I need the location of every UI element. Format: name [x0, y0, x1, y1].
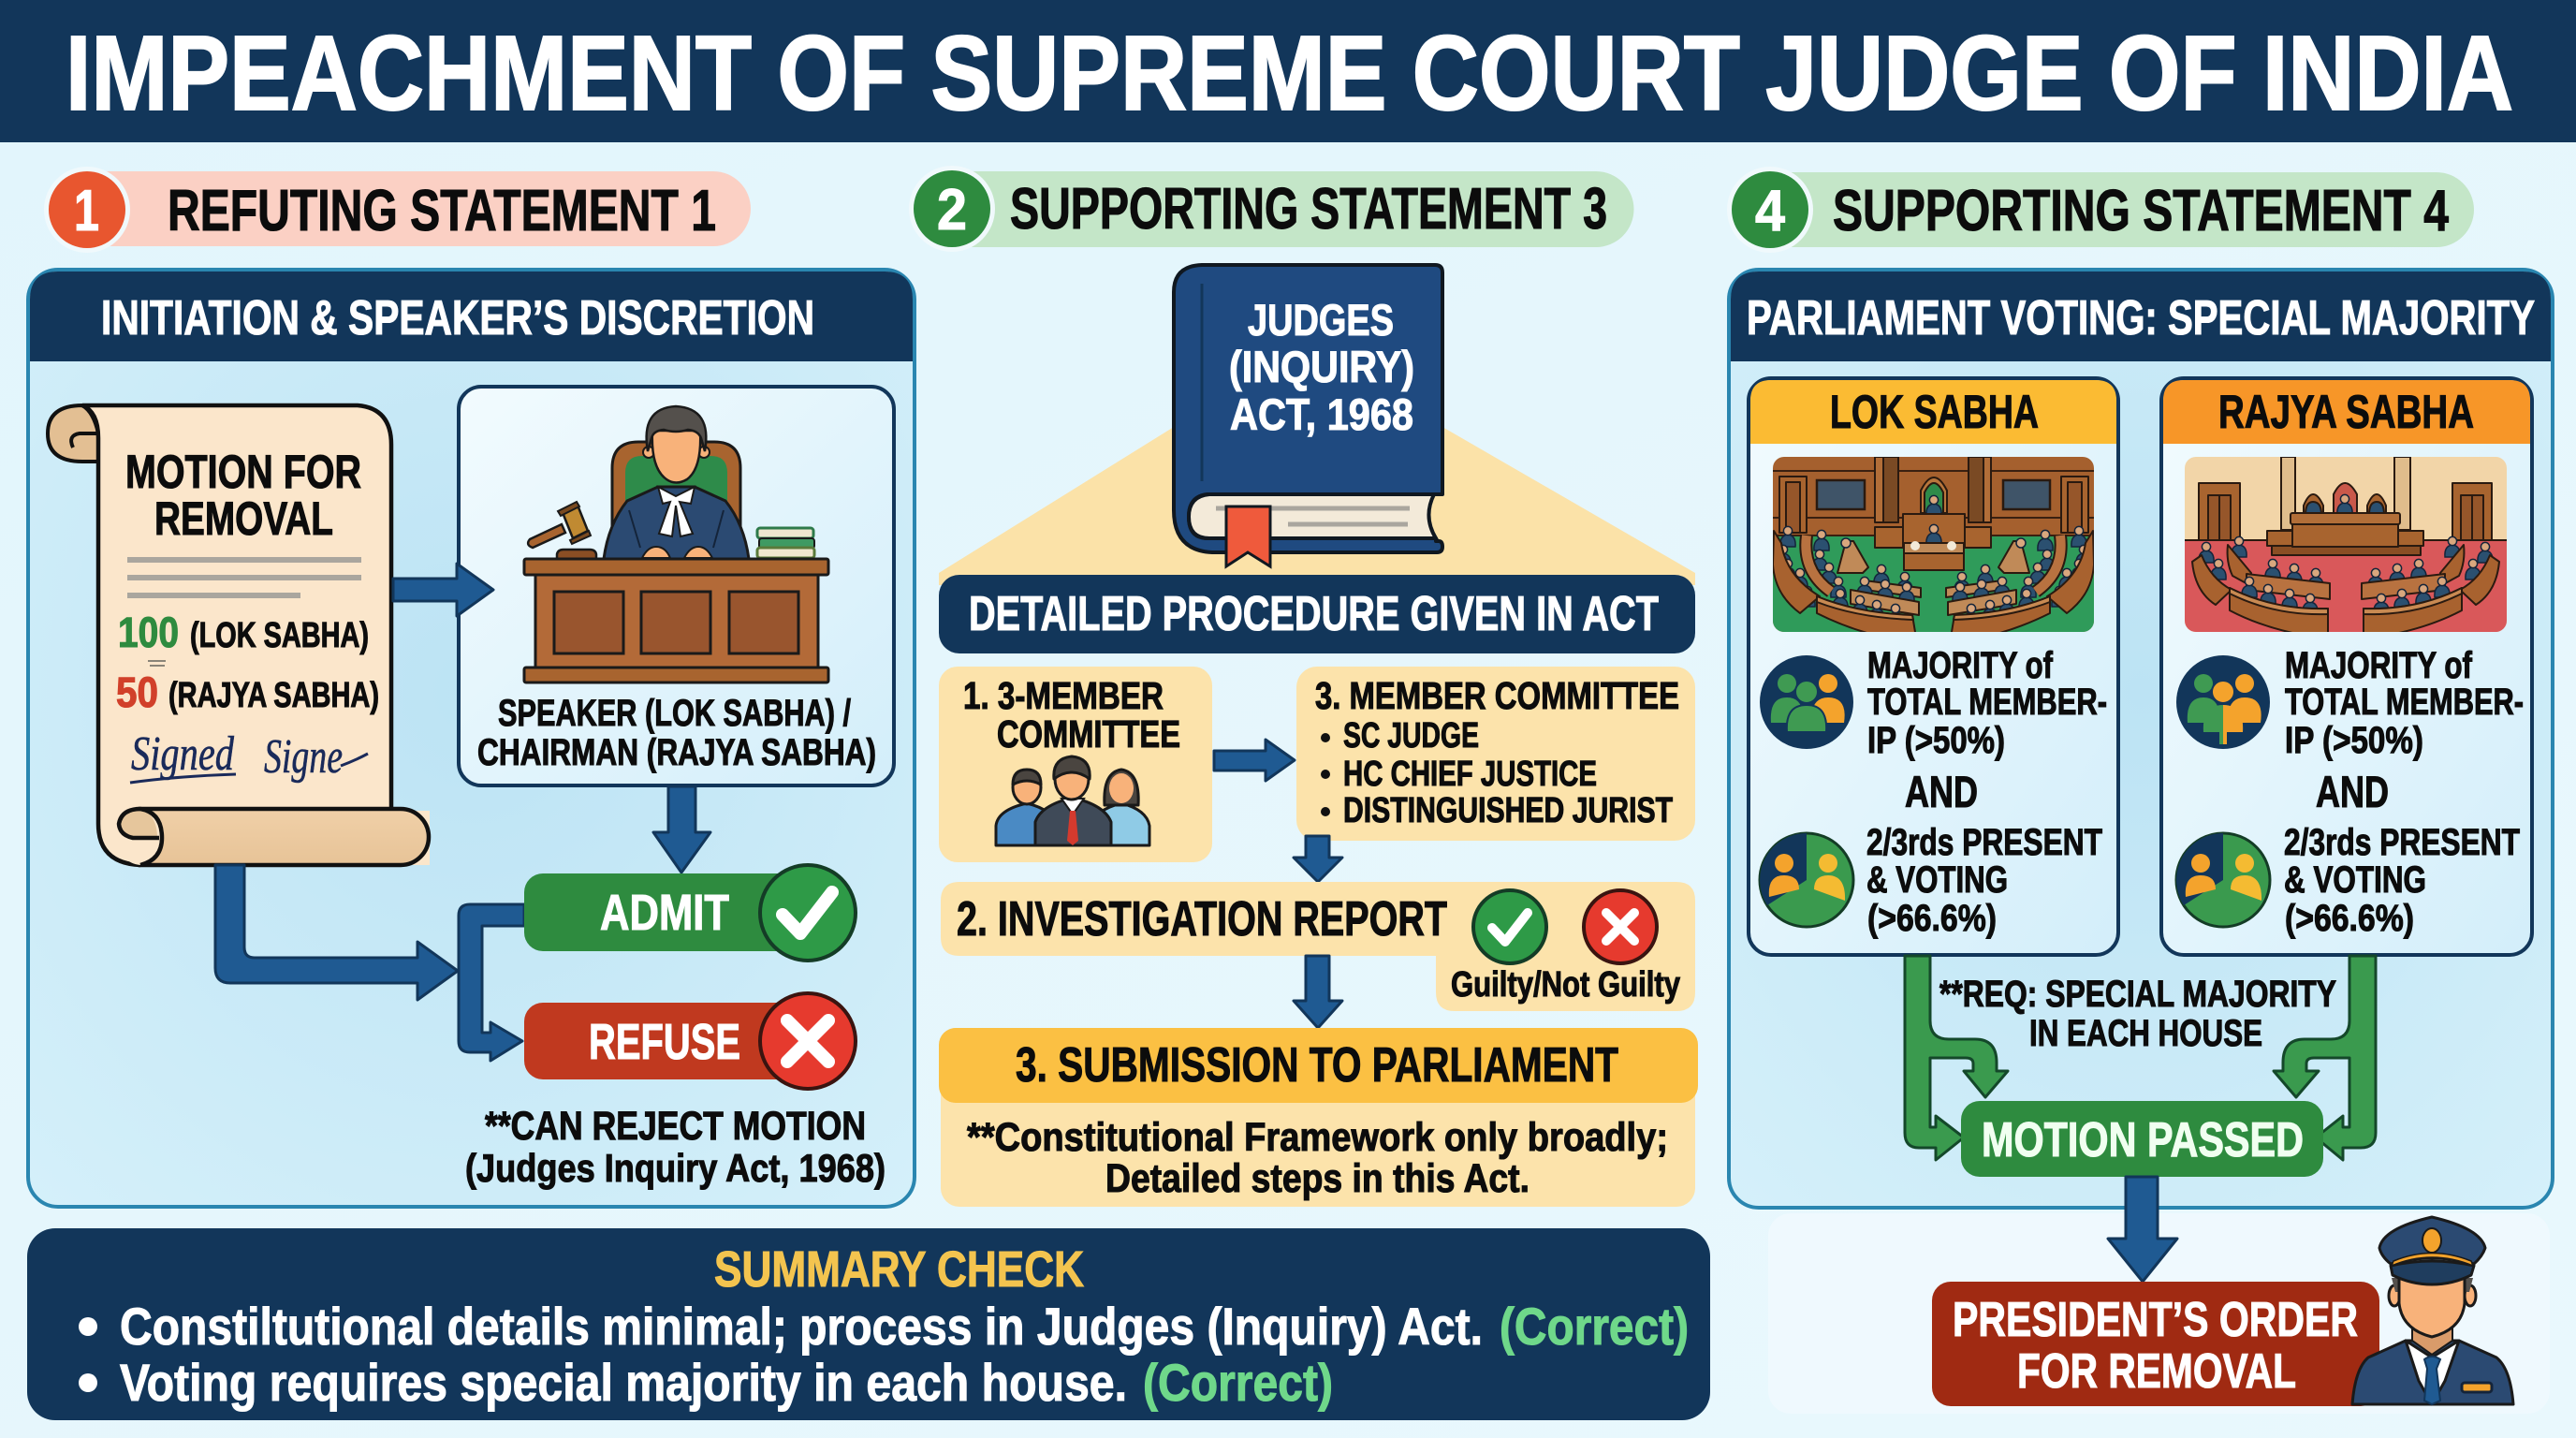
card: rajya sabha: 2/3rds PRESENT	[2284, 822, 2520, 863]
panel heading	[1731, 271, 2551, 361]
box: 3-member committee	[939, 667, 1212, 862]
box: investigation report: 2. INVESTIGATION REPORT	[957, 892, 1447, 946]
panel heading	[30, 271, 913, 361]
note: can reject motion: **CAN REJECT MOTION	[485, 1104, 866, 1149]
banner: detailed procedure: DETAILED PROCEDURE GIVEN IN ACT	[969, 587, 1659, 641]
banner: detailed procedure	[939, 575, 1695, 653]
scroll: motion for removal: REMOVAL	[154, 492, 333, 545]
card: lok sabha	[1749, 378, 2118, 955]
icon: two-thirds pie	[1760, 833, 1853, 927]
box: member committee list: HC CHIEF JUSTICE	[1343, 755, 1597, 794]
button: refuse: REFUSE	[589, 1014, 740, 1070]
box: member committee list	[1296, 667, 1695, 841]
scroll: motion for removal: 100	[118, 609, 179, 656]
scroll: motion for removal: 50	[116, 668, 158, 716]
box: member committee list: 3. MEMBER COMMITTEE	[1315, 674, 1679, 717]
scroll: motion for removal: (LOK SABHA)	[190, 616, 369, 655]
box: submission to parliament: 3. SUBMISSION TO PARLIAMENT	[1016, 1038, 1618, 1093]
icon: judge at desk	[524, 406, 828, 682]
scroll: motion for removal	[48, 405, 430, 865]
card: lok sabha: (>66.6%)	[1867, 898, 1997, 939]
arrow: committee	[1214, 740, 1295, 781]
panel: initiation and speaker's discretion	[28, 270, 915, 1207]
box: investigation report	[941, 882, 1695, 1011]
panel: summary check	[27, 1228, 1710, 1420]
arrow: motion passed to president's order	[2108, 1177, 2177, 1282]
note: special majority requirement: IN EACH HOUSE	[2029, 1013, 2262, 1054]
arrows: lok sabha to motion passed	[1905, 956, 2008, 1160]
section label: supporting statement 3: 2	[937, 178, 967, 242]
box: submission to parliament: Detailed steps in this Act.	[1105, 1156, 1530, 1201]
box: motion passed: MOTION PASSED	[1982, 1113, 2304, 1167]
box: member committee list: SC JUDGE	[1343, 716, 1479, 756]
icon: president in uniform	[2352, 1217, 2513, 1404]
arrow: scroll to speaker	[393, 564, 493, 616]
box: president's order: FOR REMOVAL	[2017, 1344, 2296, 1399]
box: member committee list: DISTINGUISHED JURIST	[1343, 791, 1673, 830]
panel heading: INITIATION & SPEAKER’S DISCRETION	[101, 291, 814, 345]
icon: three people	[996, 756, 1149, 845]
scroll: motion for removal: Signed	[131, 727, 235, 781]
arrow: speaker to decision	[653, 786, 710, 873]
illustration: rajya sabha chamber	[2185, 457, 2507, 637]
card: rajya sabha: (>66.6%)	[2285, 898, 2414, 939]
card: rajya sabha	[2161, 378, 2532, 955]
box: president's order: PRESIDENT’S ORDER	[1953, 1293, 2358, 1347]
scroll: motion for removal: MOTION FOR	[125, 446, 361, 498]
card: rajya sabha: AND	[2316, 767, 2389, 816]
box: president's order	[1932, 1282, 2379, 1406]
button: admit: ADMIT	[600, 885, 729, 941]
card: lok sabha: 2/3rds PRESENT	[1866, 822, 2102, 863]
panel: summary check: (Correct)	[1143, 1353, 1333, 1412]
panel: summary check: SUMMARY CHECK	[714, 1241, 1084, 1298]
card: lok sabha: MAJORITY of	[1867, 645, 2054, 686]
card: lok sabha: AND	[1905, 767, 1978, 816]
arrow: report to submission	[1294, 956, 1342, 1028]
spotlight behind book	[939, 427, 1695, 585]
section label: supporting statement 3	[909, 166, 1634, 252]
arrows: rajya sabha to motion passed	[2274, 956, 2376, 1160]
box: 3-member committee: COMMITTEE	[997, 712, 1180, 756]
icon: judges inquiry act book: JUDGES	[1248, 295, 1394, 345]
section label: refuting statement 1: REFUTING STATEMENT 1	[168, 179, 716, 243]
icon: judges inquiry act book	[1174, 265, 1442, 566]
panel: summary check: (Correct)	[1500, 1297, 1689, 1356]
section label: refuting statement 1	[44, 167, 751, 253]
card: rajya sabha: & VOTING	[2284, 859, 2426, 901]
panel: summary check: Constiltutional details minimal; process in Judges (Inquiry) Act.	[120, 1297, 1483, 1356]
arrow: branch to refuse	[459, 904, 524, 1061]
box: speaker and chairman	[459, 387, 894, 785]
card: lok sabha: & VOTING	[1866, 859, 2008, 901]
icon: judges inquiry act book: (INQUIRY)	[1229, 342, 1414, 391]
section label: supporting statement 3: SUPPORTING STATEMENT 3	[1010, 177, 1607, 242]
icon: judges inquiry act book: ACT, 1968	[1230, 389, 1413, 439]
icon: two-thirds pie	[2176, 833, 2270, 927]
card: lok sabha: TOTAL MEMBER-	[1867, 682, 2107, 723]
box: speaker and chairman: SPEAKER (LOK SABHA) /	[498, 693, 851, 734]
box: submission to parliament	[939, 1028, 1698, 1207]
arrow: scroll to decision	[215, 865, 458, 1000]
button: refuse	[524, 993, 856, 1089]
section label: supporting statement 4: 4	[1755, 179, 1785, 243]
icon: majority of members	[1760, 655, 1853, 749]
box: 3-member committee: 1. 3-MEMBER	[963, 674, 1164, 717]
panel: parliament voting	[1729, 270, 2553, 1208]
arrow: committee to report	[1294, 836, 1342, 882]
note: special majority requirement	[1939, 974, 2336, 1054]
card: lok sabha: IP (>50%)	[1867, 720, 2005, 761]
note: can reject motion: (Judges Inquiry Act, 1968)	[465, 1146, 886, 1190]
note: can reject motion	[465, 1104, 886, 1190]
illustration: lok sabha chamber	[1773, 457, 2094, 637]
button: admit	[524, 865, 856, 961]
box: motion passed	[1961, 1101, 2323, 1177]
section label: supporting statement 4	[1727, 167, 2474, 253]
box: speaker and chairman: CHAIRMAN (RAJYA SABHA)	[477, 732, 876, 773]
box: submission to parliament: **Constitutional Framework only broadly;	[967, 1115, 1668, 1160]
panel: summary check: Voting requires special majority in each house.	[120, 1353, 1127, 1412]
card: rajya sabha: MAJORITY of	[2285, 645, 2473, 686]
section label: refuting statement 1: 1	[74, 179, 99, 243]
faint panel behind president's order	[1768, 1213, 2550, 1414]
scroll: motion for removal: (RAJYA SABHA)	[168, 676, 379, 715]
box: investigation report: Guilty/Not Guilty	[1451, 965, 1680, 1005]
icon: majority of members	[2176, 655, 2270, 749]
card: lok sabha: LOK SABHA	[1830, 386, 2039, 438]
scroll: motion for removal: Signe	[264, 730, 343, 784]
note: special majority requirement: **REQ: SPECIAL MAJORITY	[1939, 974, 2336, 1015]
card: rajya sabha: RAJYA SABHA	[2218, 386, 2474, 438]
card: rajya sabha: IP (>50%)	[2285, 720, 2423, 761]
